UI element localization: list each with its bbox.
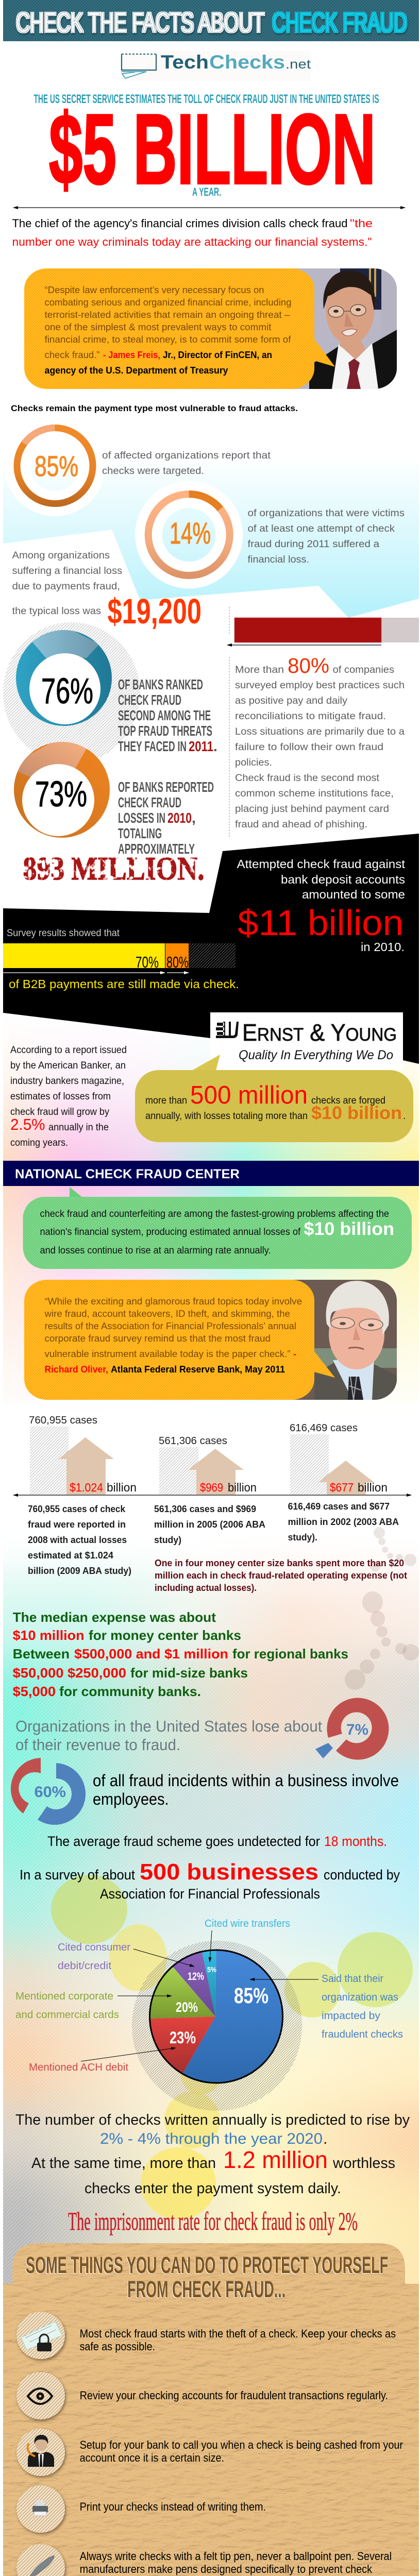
text: median expense list: $5,000: [13, 1684, 56, 1699]
text: 76% of banks: CHECK FRAUD: [118, 692, 181, 708]
intro statement: The chief of the agency's financial crimes division calls check fraud: [12, 217, 347, 230]
text: 14% description: of organizations that were victims: [247, 508, 405, 519]
quote text: Richard Oliver,: [44, 1364, 108, 1375]
text: 14% description: financial loss.: [247, 554, 309, 565]
donut chart: 14%: 14%: [170, 517, 211, 550]
callout: fastest-growing problems: $10 billion: [304, 1219, 394, 1239]
callout: 500 million checks forged: checks are forged: [311, 1095, 385, 1106]
text: 73% of banks: ,: [192, 810, 196, 826]
bar chart: 80% of companies: [227, 618, 419, 645]
quote text: Atlanta Federal Reserve Bank, May 2011: [111, 1364, 285, 1375]
cases chart: 2008: billion: [107, 1481, 137, 1494]
figure: 80%: 80%: [288, 654, 329, 677]
donut chart: 60%: 60%: [34, 1784, 66, 1801]
text: best practices: common scheme institutions face,: [235, 788, 394, 799]
tip 3: bank call: [16, 2429, 403, 2476]
hatched disc behind donuts: [3, 622, 140, 764]
text: 76% of banks: [118, 676, 217, 754]
photo: Richard Oliver: [289, 1280, 397, 1400]
text: checks written forecast: worthless: [332, 2155, 395, 2172]
quote panel: Richard Oliver: [24, 1280, 397, 1400]
tip 3: bank call: account once it is a certain size.: [80, 2451, 224, 2464]
callout: consumer debit/credit: [58, 1942, 194, 1972]
logo: TechChecks.net: [120, 51, 311, 81]
callout: 500 million checks forged: more than: [145, 1095, 187, 1106]
callout: consumer debit/credit: Cited consumer: [58, 1942, 130, 1953]
text: revenue lost to fraud: Organizations in the United States lose about: [15, 1717, 322, 1735]
text: 2002 cases: million in 2002 (2003 ABA: [288, 1517, 399, 1527]
text: checks written forecast: checks enter the payment system daily.: [85, 2180, 341, 2197]
statement: checks most vulnerable: Checks remain the payment type most vulnerable to fraud attacks.: [11, 403, 298, 413]
text: attempted check fraud: bank deposit accounts: [281, 873, 405, 886]
cases chart: 2005: [159, 1435, 257, 1495]
callout: fastest-growing problems: and losses continue to rise at an alarming rate annually.: [40, 1245, 271, 1256]
background: pale cyan shape: [3, 456, 419, 618]
text: survey results: Survey results showed that: [7, 928, 120, 939]
text: median expense list: [13, 1609, 348, 1699]
text: 2005 cases: study): [154, 1535, 181, 1545]
text: 14% description: of at least one attempt of check: [247, 523, 395, 534]
text: American Banker report: According to a report issued: [10, 1045, 127, 1056]
quote text: check fraud.”: [44, 350, 100, 360]
text: 2008 cases: fraud were reported in: [28, 1519, 126, 1530]
text: one in four banks: [155, 1558, 407, 1593]
text: checks written forecast: 2% - 4% through the year 2020: [100, 2130, 323, 2147]
text: 2005 cases: 561,306 cases and $969: [154, 1504, 256, 1514]
callout: wire transfers: [205, 1918, 290, 1962]
text: American Banker report: by the American Banker, an: [10, 1060, 126, 1071]
cases chart: 2005: 561,306 cases: [159, 1435, 227, 1447]
text: 2008 cases: [28, 1504, 131, 1576]
logo: Ernst & Young: ERNST & YOUNG: [242, 1019, 397, 1046]
text: checks written forecast: 1.2 million: [223, 2146, 328, 2173]
text: 73% of banks: CHECK FRAUD: [118, 794, 181, 810]
callout: 500 million checks forged: annually, with losses totaling more than: [145, 1111, 308, 1122]
text: 73% of banks: 2010: [167, 810, 192, 826]
tip 2: review accounts: Review your checking accounts for fraudulent transactions regularly.: [80, 2389, 388, 2402]
quote text: [44, 1296, 302, 1375]
tip 1: keep checks safe: safe as possible.: [80, 2340, 155, 2353]
callout: consumer debit/credit: debit/credit: [58, 1960, 111, 1972]
text: 18 months undetected: 18 months.: [324, 1834, 387, 1849]
text: typical loss: [12, 550, 122, 617]
text: median expense list: Between: [13, 1646, 70, 1662]
callout: corporate and commercial cards: and commercial cards: [15, 2009, 119, 2021]
text: one in four banks: including actual losses).: [155, 1583, 257, 1593]
arrow divider: [13, 207, 405, 208]
donut chart: 73%: [14, 737, 110, 838]
quote text: corporate fraud survey remind us that the most fraud: [44, 1333, 271, 1344]
icon: eye: [28, 2388, 52, 2404]
quote text: vulnerable instrument available today is the paper check.”: [44, 1349, 291, 1359]
cases chart: 2005: $969: [200, 1481, 223, 1494]
quote text: “While the exciting and glamorous fraud topics today involve: [44, 1296, 302, 1307]
text: 14% description: [247, 508, 405, 565]
text: checks written forecast: At the same time, more than: [31, 2155, 216, 2172]
text: employee fraud: [93, 1771, 399, 1808]
text: 85% description: [102, 450, 271, 477]
icon: man with phone: [28, 2435, 54, 2467]
text: 85% description: checks were targeted.: [102, 466, 204, 477]
text: survey of 500 businesses: In a survey of about: [20, 1867, 135, 1883]
pie chart: fraud types: [132, 1941, 302, 2111]
text: best practices: surveyed employ best practices such: [235, 680, 405, 691]
text: median expense list: for money center banks: [89, 1628, 241, 1643]
icon: printer: [32, 2500, 48, 2516]
text: best practices: policies.: [235, 757, 272, 768]
quote text: results of the Association for Financial Professionals’ annual: [44, 1321, 296, 1331]
text: survey of 500 businesses: conducted by: [324, 1867, 400, 1883]
background: pastel gradient: [3, 1013, 419, 1422]
callout: fraudulent checks: [250, 1973, 403, 2040]
callout: fraudulent checks: impacted by: [322, 2010, 380, 2022]
pie chart: fraud types: 20%: [176, 1999, 198, 2015]
donut chart: 76%: 76%: [41, 671, 93, 711]
a year label: A YEAR.: [192, 185, 221, 198]
text: attempted check fraud: in 2010.: [361, 940, 405, 954]
callout: fastest-growing problems: [23, 1187, 412, 1269]
quote text: -: [293, 1349, 296, 1359]
cases chart: 2005: billion: [228, 1481, 257, 1494]
donut chart: 85%: 85%: [35, 450, 78, 482]
icon: locked check: [21, 2321, 62, 2351]
photo: James Freis: [289, 268, 397, 389]
quote text: - James Freis,: [103, 350, 160, 360]
decoration: molecule blobs: [345, 1527, 419, 1690]
pie chart: fraud types: 85%: [234, 1984, 268, 2008]
logo: TechChecks.net: .net: [285, 57, 311, 72]
intro statement: number one way criminals today are attacking our financial systems.": [12, 235, 372, 248]
text: 2008 cases: billion (2009 ABA study): [28, 1566, 131, 1576]
decoration: yellow blobs: [51, 1875, 413, 2219]
tip 4: print checks: [16, 2485, 266, 2533]
tips heading: [25, 2252, 388, 2303]
quote text: wire fraud, account takeovers, ID theft, and skimming, the: [44, 1309, 290, 1319]
callout: ACH debit: [29, 2048, 176, 2073]
text: median expense list: for mid-size banks: [130, 1665, 248, 1681]
text: 73% of banks: LOSSES IN: [118, 810, 165, 826]
figure: $11 billion: $11 billion: [238, 903, 404, 943]
quote text: terrorist-related activities that remain an ongoing threat –: [44, 310, 290, 320]
text: median expense list: for regional banks: [232, 1646, 348, 1662]
text: 73% of banks: [118, 779, 214, 857]
paper background: [3, 2243, 419, 2576]
tip 2: review accounts: [16, 2372, 388, 2419]
panel: black band: [3, 834, 419, 1064]
callout: fraudulent checks: fraudulent checks: [322, 2029, 403, 2040]
text: 18 months undetected: The average fraud scheme goes undetected for: [47, 1834, 320, 1849]
text: attempted check fraud: Attempted check fraud against: [237, 857, 406, 871]
icon: pen: [28, 2555, 54, 2576]
cases chart: 2002: $677: [330, 1481, 354, 1494]
text: American Banker report: industry bankers magazine,: [10, 1076, 124, 1087]
title: CHECK THE FACTS ABOUT: [16, 7, 264, 38]
callout: 500 million checks forged: 500 million: [190, 1081, 308, 1109]
text: 2002 cases: 616,469 cases and $677: [288, 1501, 390, 1512]
cases chart: 2002: billion: [358, 1481, 388, 1494]
text: best practices: More than: [235, 665, 284, 675]
text: median expense list: $10 million: [13, 1628, 84, 1643]
tip 4: print checks: Print your checks instead of writing them.: [80, 2500, 266, 2513]
pie chart: fraud types: 23%: [170, 2028, 196, 2047]
text: median expense list: for community banks.: [59, 1684, 201, 1699]
speech bubble body: [24, 268, 314, 389]
pie chart: fraud types: 5%: [207, 1965, 216, 1974]
text: typical loss: Among organizations: [12, 550, 110, 561]
tip 5: felt tip pen: [16, 2544, 392, 2576]
text: American Banker report: check fraud will grow by: [10, 1107, 109, 1117]
cases chart: 2008: 760,955 cases: [29, 1415, 97, 1426]
quote text: “Despite law enforcement’s very necessary focus on: [44, 285, 264, 295]
dotted column rule: [229, 607, 230, 837]
text: 2008 cases: 760,955 cases of check: [28, 1504, 126, 1514]
cases chart: 2002: [290, 1422, 388, 1495]
text: B2B payments: of B2B payments are still made via check.: [9, 977, 239, 991]
text: 2002 cases: [288, 1501, 399, 1543]
callout: 500 million checks forged: $10 billion: [311, 1103, 402, 1123]
text: best practices: fraud and ahead of phishing.: [235, 819, 367, 830]
text: best practices: reconciliations to mitigate fraud.: [235, 711, 386, 722]
quote panel: James Freis: [24, 268, 397, 389]
callout: fraudulent checks: organization was: [322, 1992, 398, 2003]
logo: Ernst & Young: [210, 1012, 403, 1070]
header banner: [3, 0, 419, 41]
text: best practices: [235, 654, 405, 830]
callout: 500 million checks forged: [135, 1055, 413, 1142]
figure: 893 million: 893 MILLION.: [23, 851, 204, 887]
quote text: [44, 285, 292, 376]
text: 2008 cases: estimated at $1.024: [28, 1550, 113, 1561]
text: typical loss: the typical loss was: [12, 606, 101, 617]
logo: TechChecks.net: Checks: [209, 52, 285, 73]
callout: corporate and commercial cards: Mentioned corporate: [15, 1991, 113, 2002]
text: survey of 500 businesses: 500 businesses: [140, 1859, 318, 1885]
quote text: Jr., Director of FinCEN, an: [163, 350, 272, 360]
tips heading: FROM CHECK FRAUD...: [127, 2276, 285, 2302]
callout: 500 million checks forged: .: [403, 1111, 406, 1122]
quote text: one of the simplest & most prevalent ways to commit: [44, 322, 271, 332]
section heading: National Check Fraud Center: [3, 1161, 419, 1186]
text: 14% description: fraud during 2011 suffered a: [247, 539, 379, 550]
donut chart: 60%: [11, 1758, 86, 1825]
intro statement: "the: [350, 217, 373, 230]
text: 76% of banks: THEY FACED IN: [118, 738, 187, 754]
pie chart: fraud types: 12%: [188, 1971, 204, 1982]
background: lower pastel wash: [3, 1557, 419, 2284]
text: best practices: Loss situations are primarily due to a: [235, 726, 405, 737]
callout: fraudulent checks: Said that their: [322, 1973, 383, 1985]
quote text: combating serious and organized financial crime, including: [44, 297, 292, 308]
text: best practices: placing just behind payment card: [235, 804, 389, 815]
text: revenue lost to fraud: of their revenue to fraud.: [15, 1736, 180, 1754]
text: survey of 500 businesses: Association for Financial Professionals: [100, 1886, 320, 1902]
cases chart: 2002: 616,469 cases: [290, 1422, 358, 1434]
text: 2005 cases: [154, 1504, 265, 1545]
text: best practices: failure to follow their own fraud: [235, 742, 383, 753]
logo: TechChecks.net: Tech: [161, 52, 209, 73]
tip 1: keep checks safe: [16, 2312, 396, 2359]
text: best practices: of companies: [333, 665, 394, 675]
text: one in four banks: million each in check fraud-related operating expense (not: [155, 1570, 407, 1581]
text: 76% of banks: 2011: [189, 738, 213, 754]
text: employee fraud: of all fraud incidents within a business involve: [93, 1771, 399, 1790]
text: median expense list: $50,000 $250,000: [13, 1665, 126, 1681]
text: median expense list: The median expense was about: [13, 1609, 216, 1625]
panel: protection tips: [3, 2243, 419, 2576]
axis arrow: [13, 1495, 411, 1496]
donut chart: 73%: 73%: [35, 774, 87, 814]
bar chart: B2B payments: [3, 943, 236, 973]
text: best practices: as positive pay and daily: [235, 696, 348, 706]
text: median expense list: $500,000 and $1 million: [74, 1646, 228, 1662]
callout: fastest-growing problems: check fraud and counterfeiting are among the fastest-growing problems affecting the: [40, 1209, 389, 1219]
text: checks written forecast: .: [323, 2130, 327, 2147]
text: American Banker report: [10, 1045, 127, 1148]
text: revenue lost to fraud: [15, 1717, 322, 1754]
text: American Banker report: coming years.: [10, 1138, 68, 1148]
tip 5: felt tip pen: Always write checks with a felt tip pen, never a ballpoint pen. Several: [80, 2550, 392, 2563]
text: attempted check fraud: amounted to some: [302, 888, 405, 901]
bar chart: B2B payments: 80%: [166, 953, 189, 971]
donut chart: 14%: [140, 486, 238, 584]
quote text: agency of the U.S. Department of Treasury: [44, 365, 228, 376]
text: 73% of banks: OF BANKS REPORTED: [118, 779, 214, 795]
cases chart: 2008: $1.024: [70, 1481, 103, 1494]
text: American Banker report: annually in the: [48, 1122, 109, 1133]
callout: fastest-growing problems: nation's financial system, producing estimated annual losses of: [40, 1227, 301, 1238]
quote text: financial crime, to steal money, is to commit some form of: [44, 334, 292, 345]
figure: 2.5%: 2.5%: [10, 1115, 45, 1133]
text: typical loss: due to payments fraud,: [12, 581, 120, 592]
callout: ACH debit: Mentioned ACH debit: [29, 2062, 128, 2073]
donut chart: 85%: [9, 420, 101, 512]
logo: Ernst & Young: Quality In Everything We Do: [239, 1048, 393, 1062]
text: 76% of banks: SECOND AMONG THE: [118, 707, 211, 723]
callout: corporate and commercial cards: [15, 1991, 172, 2021]
text: one in four banks: One in four money center size banks spent more than $20: [155, 1558, 404, 1568]
donut chart: 7%: [315, 1698, 389, 1760]
text: 76% of banks: TOP FRAUD THREATS: [118, 723, 212, 739]
text: American Banker report: estimates of losses from: [10, 1091, 111, 1102]
text: typical loss: suffering a financial loss: [12, 566, 122, 577]
text: 2002 cases: study).: [288, 1532, 317, 1543]
figure: $19,200: $19,200: [107, 591, 201, 631]
text: 2005 cases: million in 2005 (2006 ABA: [154, 1519, 265, 1530]
text: survey of 500 businesses: [20, 1859, 400, 1902]
text: 85% description: of affected organizations report that: [102, 450, 271, 461]
speech bubble body: [24, 1280, 314, 1400]
cases chart: 2008: [29, 1415, 137, 1495]
donut chart: 7%: 7%: [346, 1721, 368, 1738]
text: best practices: Check fraud is the second most: [235, 773, 380, 784]
donut chart: 76%: [16, 626, 112, 726]
bar chart: B2B payments: 70%: [136, 953, 159, 971]
text: checks written forecast: [15, 2112, 410, 2197]
section heading: National Check Fraud Center: NATIONAL CHECK FRAUD CENTER: [15, 1167, 240, 1181]
tip 5: felt tip pen: manufacturers make pens designed specifically to prevent check: [80, 2563, 373, 2575]
text: 73% of banks: TOTALING: [118, 825, 162, 841]
callout: wire transfers: Cited wire transfers: [205, 1918, 290, 1929]
text: 76% of banks: OF BANKS RANKED: [118, 676, 203, 692]
text: employee fraud: employees.: [93, 1790, 169, 1808]
tips heading: FROM CHECK FRAUD...: [127, 2277, 285, 2303]
text: 2008 cases: 2008 with actual losses: [28, 1535, 127, 1545]
intro statement: [12, 217, 373, 248]
text: 73% of banks: APPROXIMATELY: [118, 841, 195, 857]
text: 76% of banks: .: [213, 738, 217, 754]
text: checks written forecast: The number of checks written annually is predicted to rise by: [15, 2112, 410, 2128]
text: attempted check fraud: [237, 857, 406, 954]
